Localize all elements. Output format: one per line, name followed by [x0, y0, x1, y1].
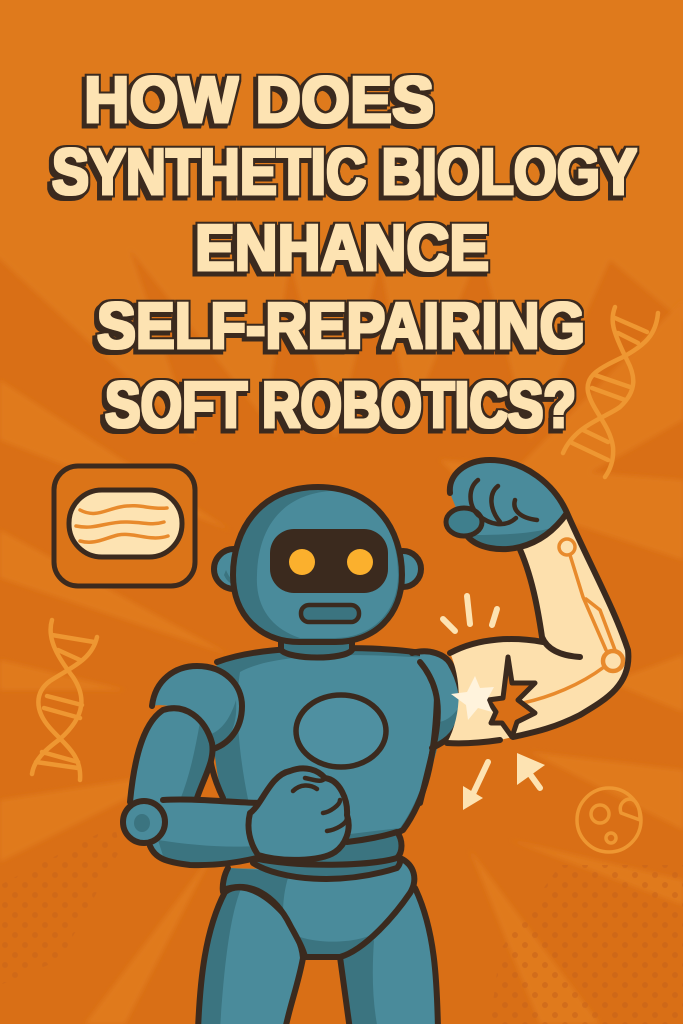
icon: microbe cell [577, 788, 641, 852]
belt [253, 832, 402, 880]
halftone dots: lower left [0, 825, 120, 985]
title line 3: ENHANCE [195, 211, 489, 284]
forearm [148, 799, 260, 865]
spark ticks [443, 596, 497, 631]
neck [281, 640, 352, 658]
circuit lines [523, 539, 623, 703]
chest oval [296, 695, 386, 767]
arrow: pointing down-left [463, 762, 488, 810]
robot [123, 460, 628, 1024]
left eye [289, 549, 315, 575]
mouth [301, 605, 359, 622]
fibre lines [76, 506, 168, 542]
thumb [446, 508, 482, 536]
right leg [340, 888, 438, 1024]
upper arm [130, 708, 213, 802]
halftone dots: lower right [490, 865, 683, 1024]
left leg [198, 886, 303, 1024]
torso [209, 648, 451, 850]
visor [270, 529, 388, 593]
left ear [214, 549, 254, 589]
right shoulder [412, 651, 462, 803]
icon: DNA helix left [32, 620, 97, 780]
elbow joint [123, 801, 165, 843]
left shoulder [152, 666, 242, 750]
fingers [470, 480, 537, 524]
damage star [488, 657, 535, 737]
right eye [347, 549, 373, 575]
pelvis [223, 858, 414, 957]
title [52, 63, 637, 441]
right ear [385, 551, 421, 587]
arrow: pointing up-left [517, 753, 545, 788]
title line 1: HOW DOES [84, 63, 434, 136]
healing sparkle [451, 676, 494, 720]
cell oval [69, 490, 182, 557]
clenched fist [249, 768, 349, 860]
raised fist [446, 460, 567, 549]
icon: DNA helix right [563, 307, 658, 477]
head [233, 487, 402, 642]
title line 5: SOFT ROBOTICS? [105, 368, 576, 441]
icon: muscle fibre panel [54, 466, 195, 586]
title line 4: SELF-REPAIRING [97, 289, 585, 362]
repaired arm [447, 513, 628, 743]
